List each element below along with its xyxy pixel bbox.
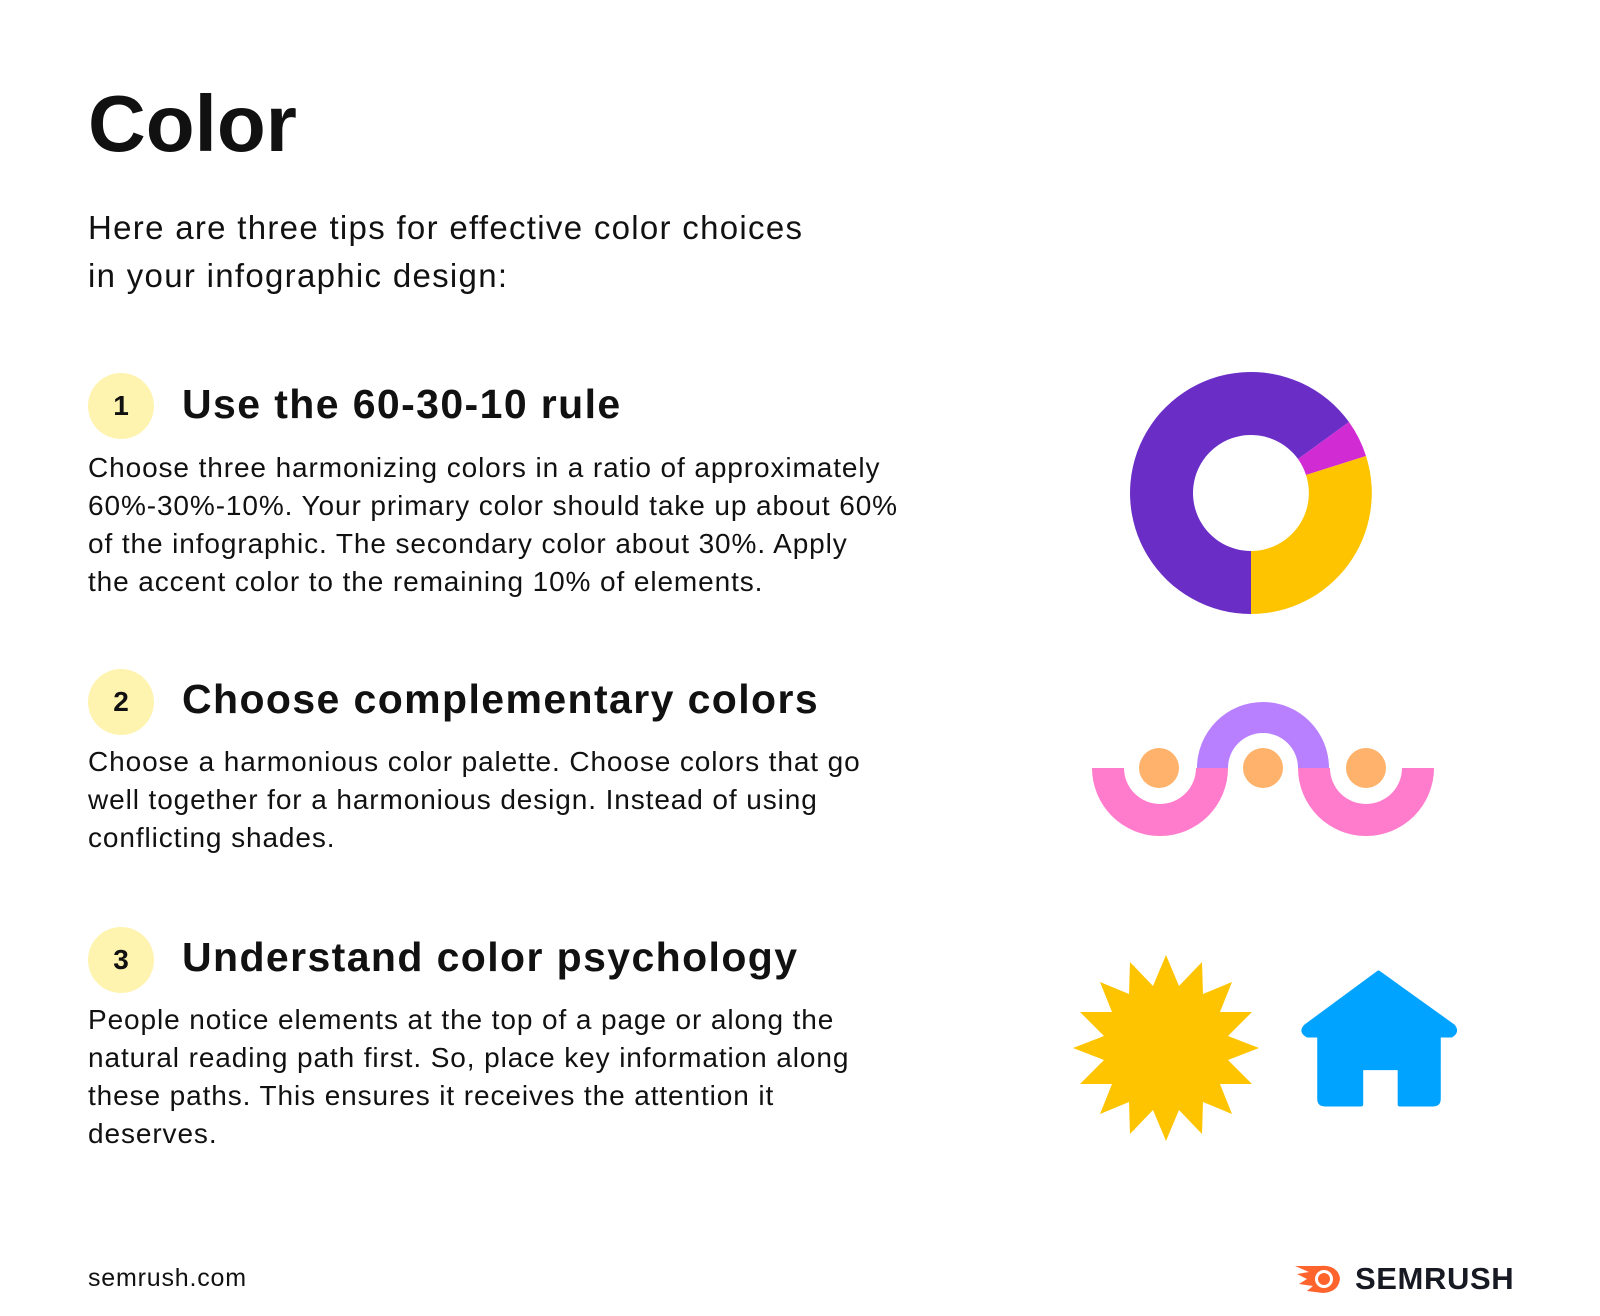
number badge 3: 3	[113, 944, 129, 975]
subtitle: in your infographic design:	[88, 257, 508, 294]
number badge 1	[88, 373, 154, 439]
number badge 2	[88, 669, 154, 735]
tip 2	[88, 669, 861, 853]
body 1	[88, 452, 898, 597]
number badge 3	[88, 927, 154, 993]
tip 1	[88, 373, 898, 597]
body 2: conflicting shades.	[88, 822, 335, 853]
logo text: SEMRUSH	[1355, 1261, 1514, 1296]
number badge 1: 1	[113, 390, 129, 421]
icon: sun	[1073, 955, 1259, 1141]
donut chart	[1130, 372, 1372, 614]
body 3: these paths. This ensures it receives the attention it	[88, 1080, 774, 1111]
tip 3	[88, 927, 849, 1149]
heading 2: Choose complementary colors	[182, 676, 819, 722]
subtitle	[88, 209, 803, 294]
body 2	[88, 746, 861, 853]
icon: semrush flame	[1295, 1266, 1340, 1293]
subtitle: Here are three tips for effective color choices	[88, 209, 803, 246]
body 1: of the infographic. The secondary color about 30%. Apply	[88, 528, 848, 559]
body 3: People notice elements at the top of a page or along the	[88, 1004, 834, 1035]
footer url: semrush.com	[88, 1264, 247, 1292]
body 3	[88, 1004, 849, 1149]
body 1: Choose three harmonizing colors in a ratio of approximately	[88, 452, 880, 483]
body 3: deserves.	[88, 1118, 218, 1149]
body 3: natural reading path first. So, place key information along	[88, 1042, 849, 1073]
logo: semrush	[1295, 1261, 1514, 1296]
arches illustration	[1092, 702, 1434, 836]
icon: house	[1301, 970, 1458, 1106]
heading 3: Understand color psychology	[182, 934, 798, 980]
heading 1: Use the 60-30-10 rule	[182, 381, 622, 427]
body 1: 60%-30%-10%. Your primary color should take up about 60%	[88, 490, 898, 521]
title: Color	[88, 79, 297, 168]
body 2: well together for a harmonious design. Instead of using	[88, 784, 818, 815]
body 1: the accent color to the remaining 10% of elements.	[88, 566, 763, 597]
number badge 2: 2	[113, 686, 129, 717]
body 2: Choose a harmonious color palette. Choose colors that go	[88, 746, 861, 777]
